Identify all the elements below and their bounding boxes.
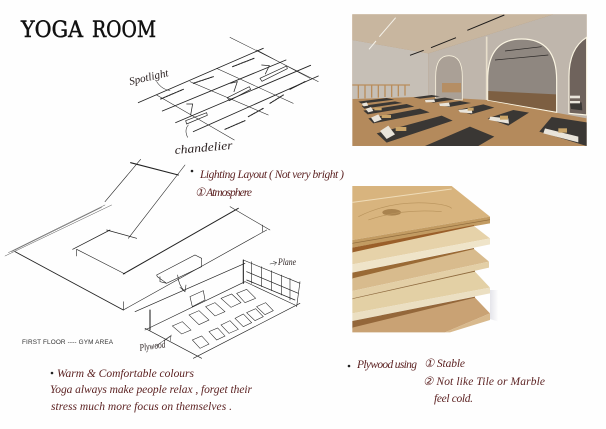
note: warm colours <box>50 368 253 413</box>
floor plan sketch <box>5 159 270 310</box>
title: YOGA <box>20 18 84 43</box>
note: plywood using: feel cold. <box>434 393 473 405</box>
label: chandelier: chandelier <box>174 138 233 157</box>
note: warm colours: Warm & Comfortable colours <box>57 368 195 380</box>
label: plane: Plane <box>277 258 296 268</box>
label: plywood: Plywood <box>138 339 167 354</box>
note: lighting layout: Lighting Layout ( Not very bright ) <box>199 169 344 181</box>
title <box>20 18 156 43</box>
label: spotlight: Spotlight <box>128 67 171 88</box>
note: plywood using: ① Stable <box>424 358 465 370</box>
caption: first floor gym area: FIRST FLOOR ---- GYM AREA <box>22 339 114 346</box>
note: warm colours: Yoga always make people relax , forget their <box>50 384 253 396</box>
title: ROOM <box>92 18 156 43</box>
note: lighting layout: ① Atmosphere <box>195 187 252 199</box>
studio room sketch <box>135 260 300 358</box>
note: plywood using <box>348 358 545 405</box>
lighting layout sketch <box>138 37 318 140</box>
note: plywood using: ② Not like Tile or Marble <box>423 376 545 388</box>
note: lighting layout <box>191 169 344 199</box>
note: warm colours: stress much more focus on themselves . <box>51 401 232 413</box>
photo: stacked plywood boards <box>352 186 498 332</box>
note: plywood using: Plywood using <box>356 359 417 371</box>
photo: yoga room render <box>352 14 587 146</box>
